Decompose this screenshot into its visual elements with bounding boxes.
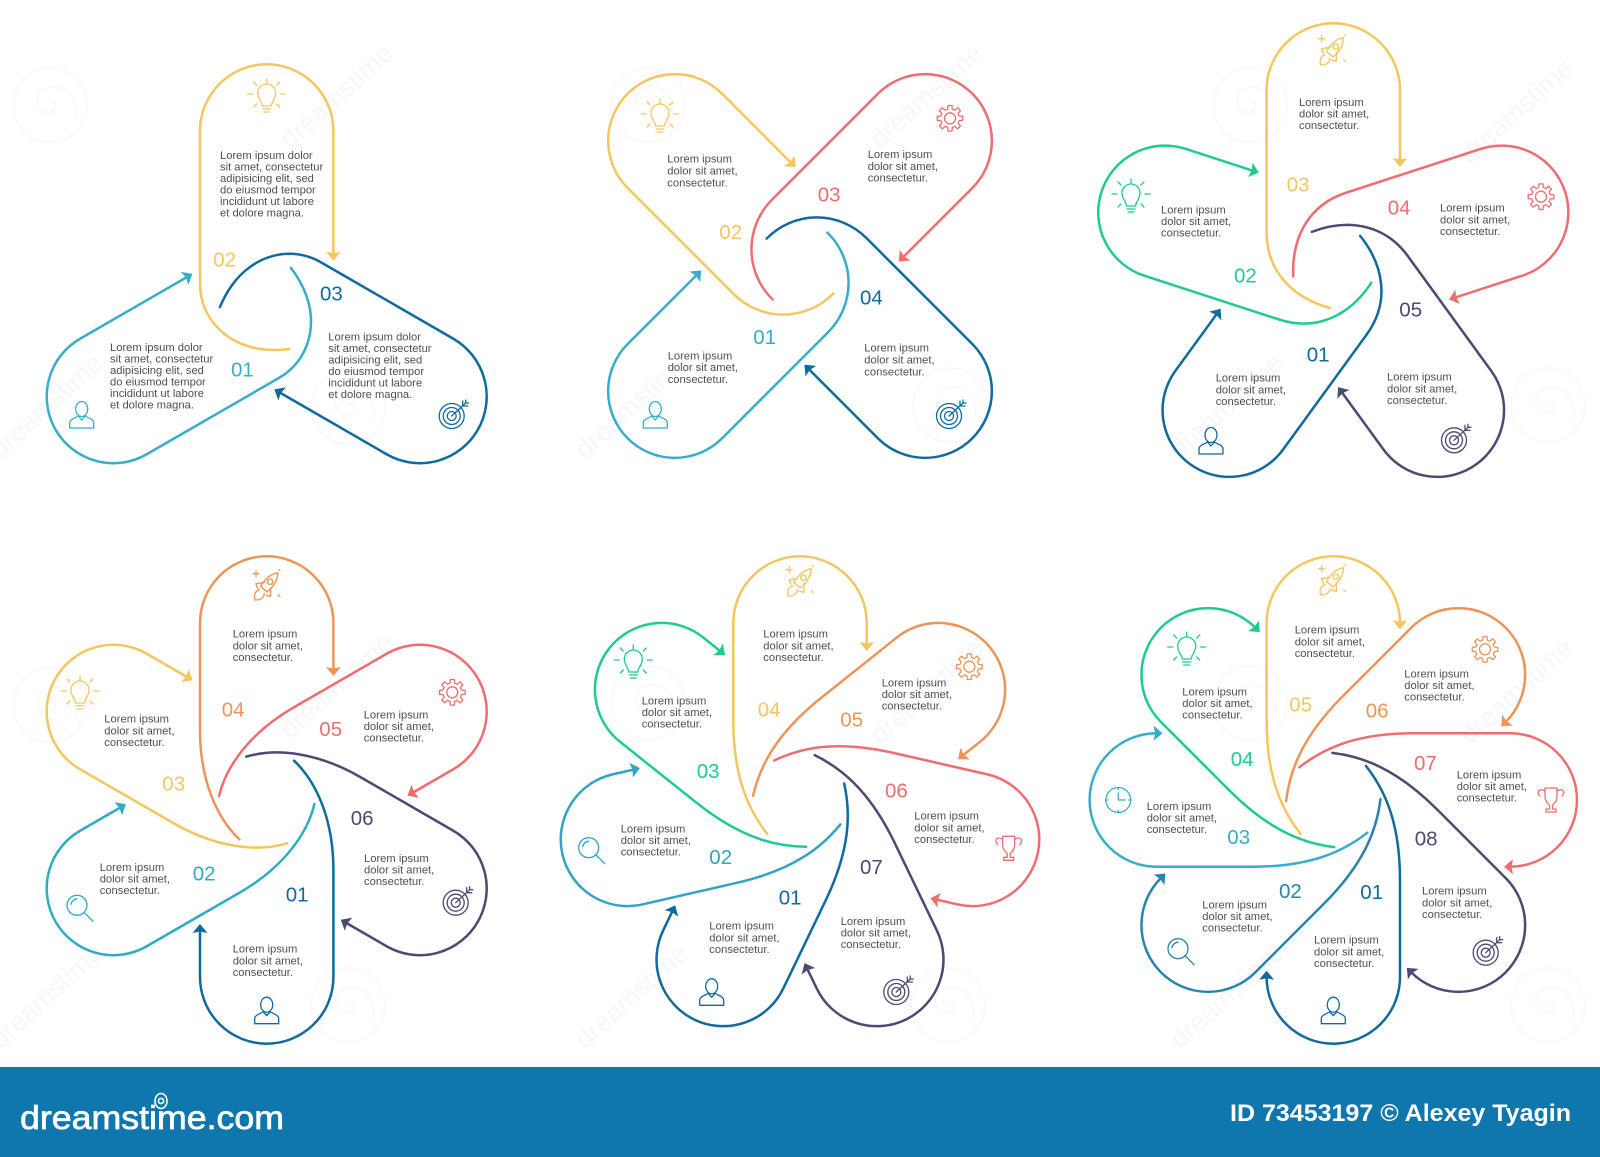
icon: trophy <box>1538 788 1564 812</box>
text block 01: dolor sit amet, <box>1314 946 1384 958</box>
text block 07: Lorem ipsum <box>1457 769 1521 781</box>
number 03: 03 <box>818 184 841 207</box>
text block 08: dolor sit amet, <box>1422 897 1492 909</box>
petal 04 outline <box>717 188 1019 491</box>
petal 07 outline <box>718 740 966 1052</box>
text block 06: Lorem ipsum <box>1404 668 1469 680</box>
text block 03: dolor sit amet, <box>868 161 938 173</box>
diagram: 7 steps <box>546 556 1052 1052</box>
text block 02: incididunt ut labore <box>220 196 314 208</box>
number 01: 01 <box>1360 881 1383 904</box>
text block 02: sit amet, consectetur <box>220 162 323 174</box>
text block 03: sit amet, consectetur <box>328 343 432 355</box>
icon: light bulb <box>614 645 652 678</box>
text block 04: Lorem ipsum <box>233 629 297 641</box>
number 02: 02 <box>1279 880 1302 903</box>
text block 01: dolor sit amet, <box>1216 384 1286 396</box>
icon: light bulb <box>641 99 679 132</box>
icon: clock <box>1106 788 1131 812</box>
petal 02 outline <box>546 720 848 919</box>
petal 05 outline <box>199 620 515 884</box>
text block 06: dolor sit amet, <box>914 822 985 834</box>
petal 02 outline <box>19 716 334 980</box>
watermark: dreamstime <box>1454 53 1579 169</box>
text block 01: Lorem ipsum dolor <box>110 342 203 354</box>
petal 06 outline <box>750 727 1052 927</box>
petal 06 outline <box>196 723 511 986</box>
text block 01: Lorem ipsum <box>1216 373 1280 385</box>
number 04: 04 <box>758 699 781 722</box>
petal 04 outline <box>1274 128 1588 350</box>
icon: light bulb <box>1168 632 1206 665</box>
text block 01: Lorem ipsum <box>233 944 297 956</box>
text block 03: et dolore magna. <box>328 389 412 401</box>
number 02: 02 <box>193 863 216 886</box>
number 06: 06 <box>1366 699 1389 722</box>
text block 02: Lorem ipsum <box>1202 899 1267 911</box>
icon: rocket <box>1313 561 1351 601</box>
text block 04: dolor sit amet, <box>763 640 834 652</box>
text block 01: et dolore magna. <box>110 400 194 412</box>
text block 05: dolor sit amet, <box>1295 636 1365 648</box>
text block 02: Lorem ipsum <box>1161 204 1226 216</box>
text block 07: consectetur. <box>1457 792 1517 804</box>
petal 08 outline <box>1257 729 1553 1025</box>
icon: gear <box>956 654 982 680</box>
text block 04: consectetur. <box>233 652 293 664</box>
icon: magnifier <box>67 895 93 921</box>
text block 05: dolor sit amet, <box>364 721 434 733</box>
number 03: 03 <box>320 283 343 306</box>
watermark: dreamstime <box>864 633 989 749</box>
text block 03: Lorem ipsum <box>104 714 169 726</box>
icon: target <box>443 887 473 915</box>
image credit: ID 73453197 © Alexey Tyagin <box>1230 1100 1571 1127</box>
text block 06: Lorem ipsum <box>364 853 429 865</box>
text block 04: Lorem ipsum <box>1182 686 1247 698</box>
text block 01: consectetur. <box>1216 396 1276 408</box>
text block 02: dolor sit amet, <box>621 835 691 847</box>
number 04: 04 <box>222 699 245 722</box>
text block 04: dolor sit amet, <box>864 354 935 366</box>
text block 01: Lorem ipsum <box>668 350 732 362</box>
petal 01 outline <box>575 183 878 485</box>
text block 01: Lorem ipsum <box>709 921 774 933</box>
icon: gear <box>1528 184 1554 210</box>
text block 01: do eiusmod tempor <box>110 376 206 388</box>
petal 02 outline <box>200 64 341 350</box>
text block 02: consectetur. <box>621 846 681 858</box>
number 06: 06 <box>885 780 908 803</box>
watermark: dreamstime <box>274 628 399 744</box>
petal 05 outline <box>732 596 1037 879</box>
text block 04: dolor sit amet, <box>233 640 303 652</box>
text block 03: consectetur. <box>1147 824 1207 836</box>
icon: target <box>1442 424 1471 453</box>
text block 03: adipisicing elit, sed <box>328 354 422 366</box>
text block 01: incididunt ut labore <box>110 388 204 400</box>
watermark: dreamstime <box>569 938 694 1054</box>
text block 03: consectetur. <box>868 173 928 185</box>
petal 02 outline <box>1081 121 1395 343</box>
text block 03: dolor sit amet, <box>1299 109 1369 121</box>
number 01: 01 <box>779 886 802 909</box>
footer banner <box>0 1067 1600 1157</box>
text block 01: dolor sit amet, <box>709 932 780 944</box>
text block 05: Lorem ipsum <box>1295 625 1359 637</box>
petal 05 outline <box>1267 556 1408 834</box>
text block 04: dolor sit amet, <box>1440 214 1510 226</box>
text block 05: consectetur. <box>882 700 942 712</box>
text block 06: consectetur. <box>1404 692 1465 704</box>
text block 03: consectetur. <box>642 718 702 730</box>
text block 01: dolor sit amet, <box>233 955 303 967</box>
icon: target <box>439 400 469 428</box>
text block 03: do eiusmod tempor <box>328 366 424 378</box>
text block 02: consectetur. <box>667 177 728 189</box>
icon: trophy <box>996 836 1022 860</box>
text block 03: consectetur. <box>104 737 165 749</box>
text block 04: consectetur. <box>1182 710 1243 722</box>
text block 01: dolor sit amet, <box>668 362 738 374</box>
icon: light bulb <box>1112 179 1150 212</box>
icon: person <box>1321 997 1345 1024</box>
number 02: 02 <box>719 221 742 244</box>
text block 05: dolor sit amet, <box>1387 383 1457 395</box>
text block 01: consectetur. <box>668 374 728 386</box>
text block 02: Lorem ipsum dolor <box>220 150 313 162</box>
icon: rocket <box>247 566 285 606</box>
text block 02: dolor sit amet, <box>1202 911 1273 923</box>
icon: light bulb <box>61 676 99 709</box>
text block 03: Lorem ipsum <box>1299 97 1364 109</box>
text block 02: do eiusmod tempor <box>220 184 316 196</box>
text block 01: consectetur. <box>1314 958 1374 970</box>
watermark: dreamstime <box>274 38 399 154</box>
icon: magnifier <box>1168 939 1194 965</box>
petal 04 outline <box>733 556 874 834</box>
text block 01: Lorem ipsum <box>1314 935 1379 947</box>
number 03: 03 <box>1287 174 1310 197</box>
text block 01: consectetur. <box>233 967 293 979</box>
number 03: 03 <box>1227 826 1250 849</box>
text block 03: incididunt ut labore <box>328 377 422 389</box>
number 01: 01 <box>1307 344 1330 367</box>
text block 04: consectetur. <box>1440 226 1500 238</box>
text block 04: Lorem ipsum <box>864 343 929 355</box>
icon: target <box>936 400 966 428</box>
text block 08: consectetur. <box>1422 909 1482 921</box>
icon: person <box>70 402 94 428</box>
icon: person <box>255 997 279 1024</box>
icon: rocket <box>1313 31 1351 71</box>
petal 01 outline <box>19 223 336 488</box>
text block 03: Lorem ipsum <box>642 695 706 707</box>
text block 03: dolor sit amet, <box>642 707 712 719</box>
number 04: 04 <box>1231 748 1254 771</box>
number 07: 07 <box>860 856 883 879</box>
text block 02: consectetur. <box>1161 228 1221 240</box>
text block 02: Lorem ipsum <box>621 823 685 835</box>
text block 03: dolor sit amet, <box>1147 813 1217 825</box>
number 02: 02 <box>213 249 236 272</box>
text block 01: adipisicing elit, sed <box>110 365 204 377</box>
icon: magnifier <box>579 838 605 864</box>
text block 03: Lorem ipsum dolor <box>328 331 421 343</box>
petal 03 outline <box>1267 23 1408 308</box>
number 01: 01 <box>231 359 254 382</box>
petal 01 outline <box>1130 190 1411 503</box>
text block 01: sit amet, consectetur <box>110 354 213 366</box>
number 05: 05 <box>319 718 342 741</box>
text block 05: dolor sit amet, <box>882 689 952 701</box>
text block 05: consectetur. <box>1295 648 1355 660</box>
text block 05: Lorem ipsum <box>364 709 428 721</box>
icon: target <box>1473 937 1503 965</box>
petal 01 outline <box>193 761 333 1044</box>
text block 04: Lorem ipsum <box>763 629 828 641</box>
petal 05 outline <box>1249 195 1531 508</box>
text block 02: dolor sit amet, <box>100 874 170 886</box>
petal 03 outline <box>22 614 338 877</box>
text block 07: consectetur. <box>841 939 901 951</box>
petal 04 outline <box>1114 575 1410 871</box>
text block 02: consectetur. <box>1202 922 1263 934</box>
text block 02: consectetur. <box>100 885 160 897</box>
watermark: dreamstime <box>1164 938 1289 1054</box>
text block 02: Lorem ipsum <box>667 154 732 166</box>
text block 06: dolor sit amet, <box>1404 680 1475 692</box>
icon: person <box>700 979 724 1005</box>
text block 04: consectetur. <box>763 652 824 664</box>
diagram: 5 steps <box>1081 23 1588 508</box>
text block 07: dolor sit amet, <box>1457 781 1527 793</box>
petal 04 outline <box>200 556 341 839</box>
text block 02: Lorem ipsum <box>100 862 164 874</box>
text block 05: Lorem ipsum <box>1387 372 1452 384</box>
number 02: 02 <box>1234 265 1257 288</box>
diagram: 4 steps <box>575 41 1025 491</box>
petal 03 outline <box>568 590 873 873</box>
text block 01: consectetur. <box>709 944 770 956</box>
text block 02: dolor sit amet, <box>667 166 738 178</box>
number 05: 05 <box>1289 694 1312 717</box>
text block 06: consectetur. <box>914 834 975 846</box>
number 03: 03 <box>162 773 185 796</box>
icon: target <box>884 976 913 1004</box>
petal 01 outline <box>1259 766 1400 1044</box>
petal 07 outline <box>1299 733 1577 874</box>
number 08: 08 <box>1415 827 1438 850</box>
text block 04: consectetur. <box>864 366 925 378</box>
icon: rocket <box>781 562 819 602</box>
number 05: 05 <box>1399 299 1422 322</box>
text block 07: dolor sit amet, <box>841 928 911 940</box>
text block 08: Lorem ipsum <box>1422 886 1487 898</box>
number 04: 04 <box>1388 197 1411 220</box>
number 05: 05 <box>840 709 863 732</box>
text block 04: Lorem ipsum <box>1440 203 1505 215</box>
icon: person <box>1199 428 1223 454</box>
diagram: 3 steps <box>19 64 511 494</box>
text block 03: Lorem ipsum <box>868 149 932 161</box>
number 06: 06 <box>351 807 374 830</box>
number 02: 02 <box>709 846 732 869</box>
text block 03: consectetur. <box>1299 120 1359 132</box>
icon: person <box>643 402 667 428</box>
text block 06: Lorem ipsum <box>914 811 979 823</box>
logo text: dreamstime.com <box>20 1099 284 1136</box>
watermark: dreamstime <box>1454 633 1579 749</box>
text block 05: consectetur. <box>364 732 424 744</box>
petal 02 outline <box>581 41 883 344</box>
number 07: 07 <box>1414 752 1437 775</box>
text block 03: Lorem ipsum <box>1147 801 1211 813</box>
text block 07: Lorem ipsum <box>841 916 905 928</box>
icon: gear <box>937 106 963 131</box>
text block 06: consectetur. <box>364 876 424 888</box>
text block 05: Lorem ipsum <box>882 677 946 689</box>
diagram: 8 steps <box>1090 556 1577 1044</box>
icon: light bulb <box>248 79 286 112</box>
number 04: 04 <box>860 286 883 309</box>
petal 06 outline <box>1262 581 1558 877</box>
petal 01 outline <box>627 737 875 1049</box>
petal 03 outline <box>722 47 1025 349</box>
logo spiral icon <box>155 1094 167 1108</box>
text block 04: dolor sit amet, <box>1182 698 1253 710</box>
petal 02 outline <box>1109 723 1405 1019</box>
text block 06: dolor sit amet, <box>364 865 434 877</box>
watermark: dreamstime <box>1164 348 1289 464</box>
text block 03: dolor sit amet, <box>104 725 175 737</box>
petal 03 outline <box>1090 726 1367 867</box>
icon: gear <box>440 680 465 705</box>
number 01: 01 <box>286 884 309 907</box>
petal 03 outline <box>193 229 511 494</box>
watermark: dreamstime <box>569 348 694 464</box>
diagram: 6 steps <box>19 556 515 1044</box>
number 03: 03 <box>697 760 720 783</box>
text block 02: et dolore magna. <box>220 208 304 220</box>
icon: gear <box>1472 636 1498 662</box>
text block 05: consectetur. <box>1387 395 1447 407</box>
text block 02: dolor sit amet, <box>1161 216 1231 228</box>
number 01: 01 <box>753 326 776 349</box>
text block 02: adipisicing elit, sed <box>220 173 314 185</box>
watermark: dreamstime <box>864 38 989 154</box>
